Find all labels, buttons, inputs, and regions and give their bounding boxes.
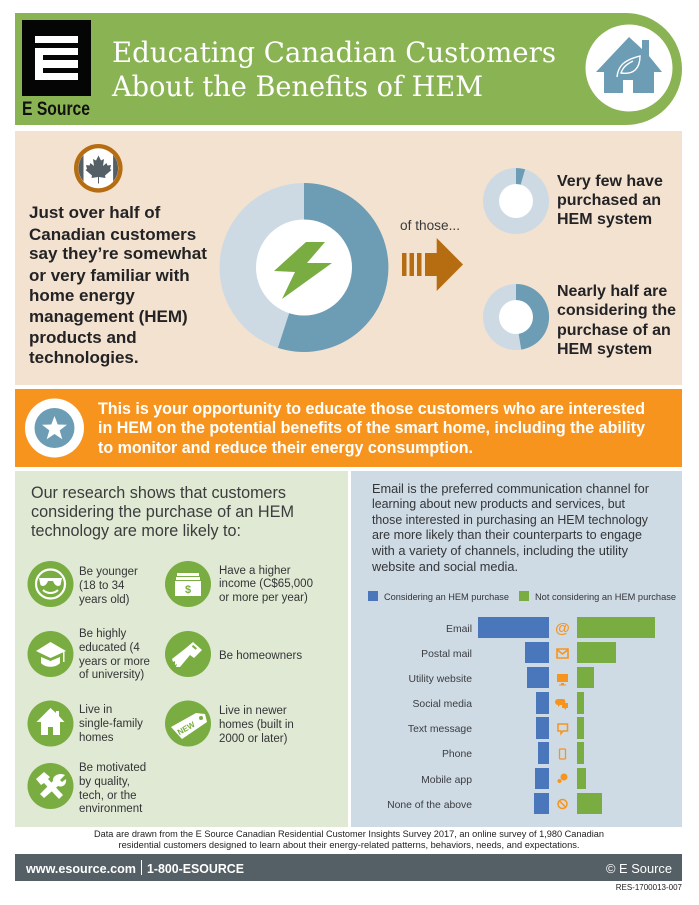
icon: star [25, 398, 84, 458]
row: postal mail: Postal mail [421, 649, 472, 660]
text: nearly half: Nearly half are [557, 283, 667, 300]
E Source logo [22, 20, 91, 120]
text: just over half: Just over half of [29, 203, 161, 222]
text: income: income (C$65,000 [219, 578, 313, 590]
text: just over half [29, 203, 207, 367]
text: newer homes: 2000 or later) [219, 733, 288, 745]
text: just over half: or very familiar with [29, 266, 190, 285]
source note [94, 829, 604, 850]
callout text: in HEM on the potential benefits of the smart home, including the ability [98, 419, 646, 437]
row: mobile app: Mobile app [421, 775, 472, 786]
arrow [402, 238, 463, 291]
icon: new tag: NEW [176, 720, 197, 737]
title [111, 36, 556, 103]
text: motivated: tech, or the [79, 790, 137, 802]
row: text message [408, 717, 584, 739]
intro text: considering the purchase of an HEM [31, 503, 294, 521]
legend: Considering an HEM purchase [384, 591, 509, 602]
row: social media: Social media [412, 699, 472, 710]
row: email: @ [555, 620, 570, 637]
title: Educating Canadian Customers [112, 36, 556, 69]
row: postal mail [421, 642, 616, 663]
chart: considering donut [483, 284, 549, 350]
panel: communication channels [351, 471, 682, 827]
icon: cash [165, 561, 211, 607]
text: educated: Be highly [79, 628, 127, 640]
row: email [446, 617, 655, 638]
intro text [31, 484, 294, 540]
text: newer homes: homes (built in [219, 719, 294, 731]
icon: tools [28, 763, 74, 809]
text: younger: (18 to 34 [79, 580, 125, 592]
row: mobile app [421, 768, 586, 789]
paragraph: Email is the preferred communication channel for [372, 481, 650, 496]
text: educated: educated (4 [79, 642, 140, 654]
text: nearly half: considering the [557, 302, 676, 319]
paragraph: website and social media. [371, 559, 518, 574]
text: just over half: home energy [29, 286, 135, 305]
row: utility website [408, 667, 594, 688]
text: younger [79, 566, 138, 606]
source note: residential customers designed to learn about their energy-related patterns, behaviors, needs, and expectations. [118, 840, 580, 850]
text: nearly half [557, 283, 676, 358]
icon: graduation cap [28, 631, 74, 677]
text: just over half: Canadian customers [29, 225, 196, 244]
header banner [15, 13, 682, 125]
footer bar: © E Source [606, 861, 672, 876]
icon: lightning bolt [274, 242, 332, 299]
source note: Data are drawn from the E Source Canadian Residential Customer Insights Survey 2017, an online survey of 1,980 Canadian [94, 829, 604, 839]
text: income: Have a higher [219, 565, 291, 577]
title: About the Benefits of HEM [111, 70, 483, 103]
chart: familiar donut [220, 183, 388, 352]
text: very few: HEM system [557, 211, 652, 228]
panel: HEM familiarity [15, 131, 682, 385]
text: younger: years old) [79, 594, 130, 606]
text: very few: purchased an [557, 192, 661, 209]
callout text: This is your opportunity to educate those customers who are interested [98, 400, 645, 418]
panel: customer traits [15, 471, 348, 827]
text: very few [557, 173, 663, 228]
footer bar: 1-800-ESOURCE [147, 861, 244, 876]
text: just over half: technologies. [29, 348, 139, 367]
text: motivated: Be motivated [79, 762, 146, 774]
text: income [219, 565, 313, 604]
intro text: technology are more likely to: [31, 522, 241, 540]
icon: smiley with sunglasses [28, 561, 74, 607]
legend [368, 591, 676, 602]
footer bar [15, 854, 682, 881]
legend: Not considering an HEM purchase [535, 591, 676, 602]
paragraph [371, 481, 650, 574]
text: income: or more per year) [219, 592, 308, 604]
icon: new tag [165, 700, 211, 746]
callout text: to monitor and reduce their energy consumption. [98, 439, 473, 457]
text: single-family: homes [79, 732, 114, 744]
text: educated: of university) [79, 669, 144, 681]
icon: Canadian flag [74, 144, 123, 193]
paragraph: those interested in purchasing an HEM technology [372, 512, 649, 527]
icon: cash: $ [185, 584, 191, 596]
row: email: Email [446, 624, 472, 635]
text: younger: Be younger [79, 566, 138, 578]
row: phone [442, 742, 584, 764]
row: utility website: Utility website [408, 674, 472, 685]
text: newer homes [219, 705, 294, 745]
text: just over half: management (HEM) [29, 307, 188, 326]
chart: purchased donut [483, 168, 549, 234]
text: single-family: Live in [79, 704, 112, 716]
row: none of the above [387, 793, 602, 814]
text: single-family: single-family [79, 718, 143, 730]
footer bar: www.esource.com [25, 861, 136, 876]
row: text message: Text message [408, 724, 472, 735]
E Source logo: E Source [22, 99, 90, 120]
text: motivated: by quality, [79, 776, 130, 788]
text: single-family [79, 704, 143, 744]
row: social media [412, 692, 584, 714]
text: just over half: products and [29, 328, 137, 347]
text: educated: years or more [79, 656, 150, 668]
text: nearly half: purchase of an [557, 322, 671, 339]
text: homeowners: Be homeowners [219, 650, 302, 662]
icon: key [165, 631, 211, 677]
row: none of the above: None of the above [387, 800, 472, 811]
text: just over half: say they’re somewhat [29, 244, 207, 263]
icon: house [28, 700, 74, 746]
chart: channel bars [387, 617, 655, 814]
text: newer homes: Live in newer [219, 705, 287, 717]
text: motivated [79, 762, 146, 815]
of those label: of those... [400, 218, 460, 233]
paragraph: are more likely than their counterparts to engage [372, 527, 642, 542]
text: educated [79, 628, 150, 681]
text: very few: Very few have [557, 173, 663, 190]
text: nearly half: HEM system [557, 341, 652, 358]
paragraph: learning about new products and services, but [372, 496, 625, 511]
row: phone: Phone [442, 749, 472, 760]
paragraph: with a variety of channels, including the utility [371, 543, 629, 558]
callout text [98, 400, 646, 457]
icon: house with leaf [586, 24, 672, 112]
document code: RES-1700013-007 [616, 883, 683, 892]
panel: opportunity callout [15, 389, 682, 467]
intro text: Our research shows that customers [31, 484, 286, 502]
text: motivated: environment [79, 803, 143, 815]
